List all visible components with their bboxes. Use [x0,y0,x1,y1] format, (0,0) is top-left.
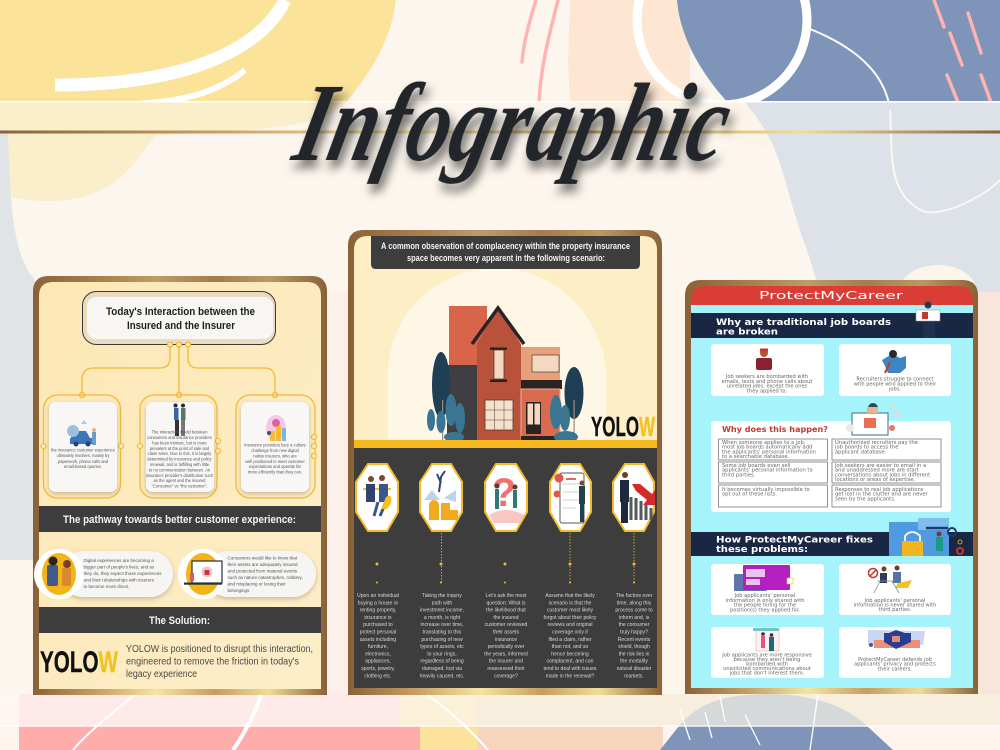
logo: yolow: YOLOW [591,411,655,442]
callout: asset protection [178,549,316,599]
heading: why broken: Why are traditional job boards [716,318,891,328]
text: column four: hence becoming [551,651,589,657]
text: column four: made in the renewal? [546,673,595,679]
table text: and unaddressed more are start [835,468,919,474]
card: defends privacy [839,627,951,678]
panel: why does this happen [711,403,951,512]
text: never shared: information is never shared with [854,603,936,609]
text: column one: electronics, [365,651,391,657]
text: column two: path with [432,600,452,606]
text: solution: legacy experience [126,669,197,680]
card: paperwork experience [41,395,124,498]
heading: the solution: The Solution: [149,615,210,627]
text: column two: increase over time, [420,622,464,628]
text: asset protection: and protected from material events [228,568,298,574]
text: card two: renewal, and is fulfilling with little [150,462,210,467]
callout: digital experiences [34,549,173,599]
text: card two: The interaction model between [152,430,208,434]
text: defends privacy: applicants' privacy and protects [854,662,936,668]
text: column two: regardless of being [420,659,464,665]
text: column two: investment income, [420,608,464,614]
text: info shared: the people hiring for the [734,603,796,609]
text: column five: markets. [624,673,644,679]
heading: today's interaction [82,292,276,344]
table text: When someone applies to a job, [722,440,806,446]
text: column five: natural disaster [617,666,652,672]
card: digital native challenge [236,395,317,498]
text: column three: reassessed their [487,666,525,672]
text: card two: consumers and insurance providers [147,435,212,440]
icon: laptop lock [184,561,222,585]
panel: protectmycareer [685,280,978,694]
text: column three: question: What is [486,600,526,606]
table text: get lost in the clutter and are never [835,492,929,498]
icon: stressed recruiter [882,350,906,373]
icon: car and people [67,420,96,446]
text: defends privacy: their careers. [878,666,912,672]
heading: the solution [39,607,321,633]
text: column three: insurance [495,637,517,643]
heading: scenario: A common observation of complacency within the property insurance [381,241,630,251]
table text: applicant database. [835,449,887,455]
text: card two: as the agent and the insured [154,478,206,483]
icon: handshake [174,404,186,436]
text: card two: insurance provider's distribution such [146,473,214,478]
timeline dots [376,533,636,584]
text: column five: shield, though [618,644,650,650]
table text: conversations about jobs in different [835,472,930,478]
text: digital experiences: to become more direct. [84,584,130,589]
heading: why broken: are broken [716,328,778,338]
icon: man with sign [916,302,940,338]
text: column two: damaged, lost via [422,666,462,672]
text: solution [126,644,313,680]
text: column four: Assume that the likely [545,593,595,599]
text: digital experiences: bigger part of people's lives, and as [84,564,155,570]
text: card one: the insurance customer experience [51,448,116,452]
text: digital experiences: and their relationships with insurers [84,578,155,582]
scenario backdrop dome [388,268,606,440]
text: defends privacy: ProtectMyCareer defends job [858,657,932,663]
text: asset protection: belongings [228,588,250,593]
text: digital experiences: they do, they expect those experiences [84,571,162,576]
panel: today's interaction [33,276,327,695]
text: column three: Let's ask the most [486,593,527,599]
text: card three: more efficiently than they can. [248,470,302,475]
text: column one: renting property, [360,608,396,614]
illustration: house [447,306,562,440]
text: column four: tend to deal with issues [544,666,597,672]
icon: two people with phones [47,556,71,586]
connectors [80,342,278,398]
heading: how it fixes: these problems: [716,545,808,555]
icon: purple dashboard [734,565,793,591]
text: more responsive: bombarded with [746,662,788,668]
octagon: meeting [356,464,398,531]
text: column three: the insured [493,615,519,621]
text: card three: well positioned to meet customer [245,459,305,464]
text: recruiters: jobs. [888,386,901,392]
panel: complacency scenario [348,230,662,695]
heading: pathway: The pathway towards better customer experience: [63,514,296,526]
text: column one: furniture, [368,644,388,650]
ground strip [354,440,657,448]
card: info shared [711,564,824,615]
heading: today's interaction: Insured and the Insurer [127,320,236,332]
text: card two: determined by insurance and policy [147,457,213,462]
heading: scenario: space becomes very apparent in the following scenario: [407,253,605,263]
text: column one: assets including [360,637,396,643]
text: column five: inform and, is [619,615,650,621]
text: column two: purchasing of new [421,637,463,643]
text: column five: process come to [615,608,653,614]
header: protectmycareer: ProtectMyCareer [759,290,904,302]
text: job seekers: unrelated jobs, except the ones [727,384,808,390]
text: asset protection: such as nature catastrophes, robbery, [228,575,303,580]
text: card three: challenge from new digital [251,448,299,453]
text: never shared: Job applicants' personal [864,598,925,604]
text: column two: Taking the inquiry [422,593,462,599]
text: column one: clothing etc. [364,673,392,679]
text: column two: a month, is right [424,615,461,621]
text: column two: translating to this [423,630,462,636]
title: Infographic [283,60,743,185]
text: column one: purchased to [363,622,393,628]
table text: opt out of these lists. [722,492,777,498]
text: column five: the risk lies in [619,651,650,657]
text: column four: coverage only if [552,630,588,636]
text: column four: filed a claim, rather [548,637,592,643]
heading: why broken [691,302,973,338]
text: column four: scenario is that the [549,600,592,606]
text: more responsive: jobs that don't interest them. [729,670,805,676]
text: column three: the likelihood that [486,608,526,614]
heading: today's interaction: Today's Interaction between the [106,306,255,318]
card: interaction model [137,395,221,498]
icon: person at monitor [846,403,900,435]
table text: Responses to real job applications [835,487,924,493]
text: column one: insurance is [364,615,392,621]
text: recruiters: with people who applied to their [854,382,937,388]
text: never shared: third parties. [879,607,912,613]
text: card two: to no communication between. An [149,467,211,472]
icon: checklist people [753,628,779,651]
octagon: policy form [550,464,591,531]
table text: locations or areas of expertise. [835,477,916,483]
card: never shared [839,564,951,615]
text: asset protection: and misplacing or losing their [228,582,286,586]
heading: scenario [371,236,640,269]
text: column five: truly happy? [620,630,648,636]
text: column five: The factors over [616,593,653,599]
gold horizontal line [0,130,1000,134]
text: more responsive: because they aren't being [734,657,800,663]
table text: to a searchable database. [722,454,790,460]
text: column four: forgot about their policy [544,615,597,621]
text: more responsive: unsolicited communications about [723,666,811,672]
table text: Job seekers are easier to email in a [834,463,926,469]
text: column five: Recent events [618,637,651,643]
text: job seekers: emails, texts and phone calls about [722,379,812,385]
text: column three: the insurer and [489,659,523,665]
text: card three: Insurance providers face a culture [244,442,307,448]
text: job seekers: they applied to. [747,388,787,394]
icon: shield and lock [868,630,925,649]
table text: third parties. [722,472,756,478]
text: more responsive: Job applicants are more responsive [721,652,812,658]
text: column two: types of assets, etc [420,644,464,650]
text: column four: customer most likely [547,608,594,614]
text: column five: the mortality [620,659,648,665]
text: column one: sports, jewelry, [361,666,395,672]
text: job seekers: Job seekers are bombarded with [725,374,808,380]
text: card two: prevalent at the point of sale and [150,446,210,451]
text: solution: engineered to remove the friction in today's [126,656,299,668]
table text: the applicants' personal information [722,449,816,455]
text: info shared: information is only shared with [726,598,804,604]
table text: Unauthorized recruiters pay the [835,440,918,446]
text: card two: claim sales. Due to this, it is largely [148,451,212,456]
text: card two: has been intrinsic, but is more [152,440,207,445]
icon: frustrated man [756,348,772,370]
octagon: question mark: ? [492,471,516,515]
text: column one: appliances, [365,659,391,665]
logo: yolow: YOLOW [40,646,118,679]
table text: applicants' personal information to [722,468,813,474]
card: recruiters struggle [839,344,951,396]
text: column five: time, along this [617,600,652,606]
heading: how it fixes: How ProtectMyCareer fixes [716,536,873,546]
icon: meeting with prohibition sign [868,566,912,593]
table text: seen by the applicants. [835,496,896,502]
text: solution: YOLOW is positioned to disrupt this interaction, [126,644,313,655]
icon: growth chart [266,415,286,441]
octagon: question mark [485,464,527,531]
table text: It becomes virtually impossible to [722,487,810,493]
icon: folder and key [889,518,963,556]
text: column one: Upon an individual [357,593,399,599]
text: card two: "Consumer" vs "the customer". [152,484,207,489]
text: asset protection: their assets are adequately insured [228,562,298,567]
text: column three: periodically over [488,644,525,650]
text: card three: expectations and operate far [249,464,302,469]
text: column four: reviews and original [547,622,593,628]
text: column three: customer reviewed [485,622,528,628]
text: column two: heavily caused, etc. [420,673,464,679]
card: job seekers bombarded [711,344,824,396]
card: more responsive [711,627,824,678]
text: column two: to your rings, [427,651,457,657]
dark panel [354,448,657,688]
text: digital experiences: Digital experiences are becoming a [84,558,154,563]
octagon: falling chart [613,464,655,531]
text: column three: coverage? [494,673,518,679]
text: column one: protect personal [360,630,396,636]
octagon: coins [420,464,462,531]
heading: why does this happen: Why does this happen? [722,425,828,434]
text: info shared: Job applicants' personal [734,593,795,599]
table text: job boards to access the [834,445,898,451]
table text: Some job boards even sell [722,463,790,469]
text: column three: their assets [493,630,519,636]
text: column four: than not, and so [552,644,588,650]
text: column five: the consumer [619,622,650,628]
text: card one: ultimately involves, mainly by [57,453,110,458]
text: column four: complacent, and can [546,659,594,665]
text: column one: buying a house or [358,600,399,606]
heading: how it fixes [691,518,973,556]
table text [722,440,930,502]
text: asset protection: Consumers would like to know that [228,556,298,560]
text: card one: paperwork, phone calls and [58,459,109,464]
text: column three: the years, informed [484,651,528,657]
text: card one: email-based queries. [64,464,102,469]
text: info shared: position(s) they applied for. [730,607,800,613]
header: protectmycareer [691,286,973,305]
table text: most job boards automatically add [722,445,812,451]
text: card three: native insurers, who are [253,453,297,458]
illustration: trees [427,352,584,443]
text: recruiters: Recruiters struggle to connect [856,376,934,382]
heading: pathway [39,506,321,532]
table: causes [718,439,941,507]
